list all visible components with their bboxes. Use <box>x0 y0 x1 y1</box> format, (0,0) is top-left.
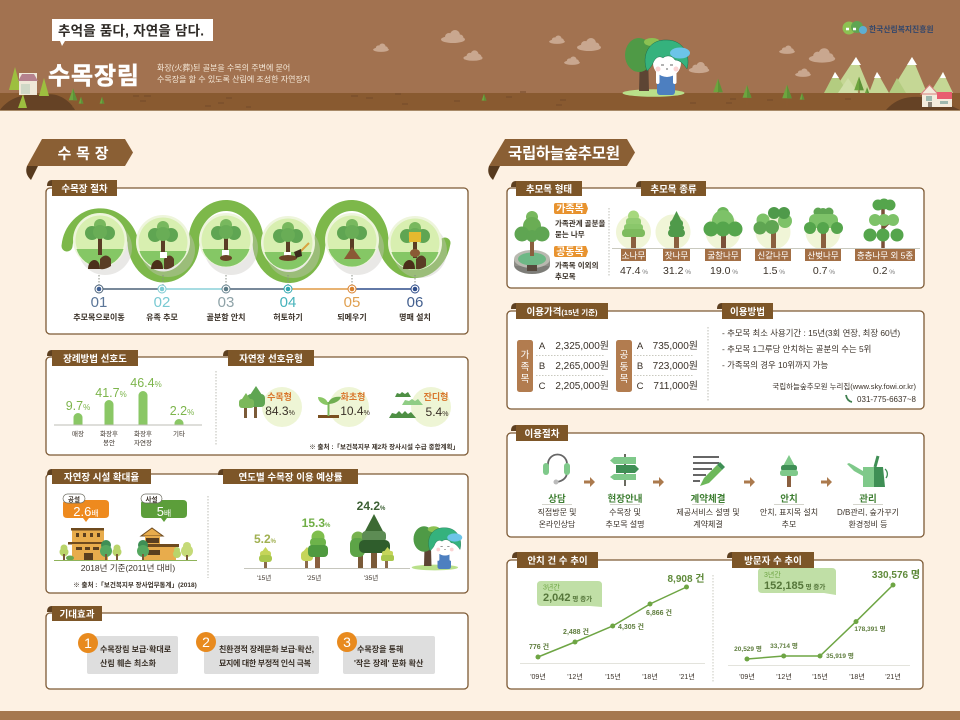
step: 관리: 환경정비 등 <box>848 519 888 529</box>
step circles <box>73 213 447 278</box>
price table: 가족목 <box>517 340 609 392</box>
effect 2 <box>196 632 319 674</box>
organization logo <box>842 21 934 34</box>
callout: 3년간 152,185명 증가: 3년간 <box>764 570 781 579</box>
price table: 공동목: B <box>637 361 643 372</box>
step: 상담: 온라인상담 <box>539 519 576 529</box>
tree species chart: 31.2 % <box>663 265 691 277</box>
effect 1: 산림 훼손 최소화 <box>100 658 157 668</box>
step: 현장안내: 수목장 및 <box>609 507 641 517</box>
callout: 사설 5배: 5배 <box>157 504 171 519</box>
step: 현장안내: 현장안내 <box>608 493 642 505</box>
step labels: 유족 추모 <box>146 313 178 322</box>
line chart: placements: '15년 <box>605 672 621 681</box>
panel: 이용가격 / 이용방법 <box>507 303 924 409</box>
tab: 자연장 선호유형: 자연장 선호유형 <box>239 353 303 365</box>
effect 3: 3 <box>343 634 351 650</box>
tab: 장례방법 선호도: 장례방법 선호도 <box>63 353 127 365</box>
step labels: 01 <box>91 294 107 311</box>
label: 가족목: 가족목 <box>556 202 584 215</box>
step: 관리: D/B관리, 숲가꾸기 <box>837 507 899 517</box>
step: 안치 <box>760 455 818 529</box>
price table: 공동목: 735,000원 <box>653 340 698 352</box>
effect 3 <box>337 632 435 674</box>
tab: 기대효과: 기대효과 <box>60 608 95 620</box>
subtitle: 화장(火葬)된 골분을 수목의 주변에 묻어 <box>157 62 290 72</box>
tab: 연도별 수목장 이용 예상률: 연도별 수목장 이용 예상률 <box>238 472 343 484</box>
line chart: visitors: '21년 <box>885 672 901 681</box>
price table: 가족목: 2,325,000원 <box>555 340 609 352</box>
panel: 기대효과 <box>46 606 468 689</box>
step: 안치: 안치 <box>780 493 798 505</box>
effect 2: 2 <box>202 634 210 650</box>
step labels: 06 <box>407 294 423 311</box>
character with tree <box>622 38 690 97</box>
section heading: 수목장: 수 목 장 <box>58 146 109 162</box>
source note: ※ 출처 :「보건복지부 제2차 장사시설 수급 종합계획」 <box>309 442 459 451</box>
step: 계약체결: 계약체결 <box>691 493 725 505</box>
label: 공동목: 공동목 <box>556 246 584 258</box>
usage notes: - 가족목의 경우 10위까지 가능 <box>722 360 828 370</box>
slogan speech bubble <box>52 19 213 46</box>
bar chart: 기타 <box>173 429 185 438</box>
bar chart: 매장 <box>72 429 84 438</box>
type: 수목형 <box>239 386 302 427</box>
green ribbon <box>67 205 445 278</box>
header banner <box>0 0 960 111</box>
chart: tree-scale usage forecast: '35년 <box>364 573 378 582</box>
price table: 가족목: 2,205,000원 <box>555 380 609 392</box>
price table: 가족목: A <box>539 341 546 352</box>
arrow <box>744 477 755 487</box>
step: 상담 <box>537 454 577 529</box>
line chart: visitors: '18년 <box>849 672 865 681</box>
panel: 장례방법 선호도 / 자연장 선호유형 <box>46 350 468 455</box>
bar chart: 자연장 <box>134 438 152 447</box>
step: 상담: 직접방문 및 <box>537 507 577 517</box>
step: 현장안내: 추모목 설명 <box>605 519 645 529</box>
step labels: 05 <box>344 294 360 311</box>
line chart: visitors <box>728 569 920 681</box>
line chart: placements: 4,305 건 <box>618 622 644 631</box>
tree species chart: 층층나무 외 5종 <box>857 250 913 260</box>
subtitle <box>157 62 310 84</box>
step: 계약체결 <box>676 457 740 529</box>
callout: 사설 5배 <box>141 494 187 522</box>
label: 공동목 <box>554 246 599 281</box>
buildings <box>54 528 197 561</box>
main title: 수목장림 <box>48 63 139 90</box>
price table: 가족목: C <box>539 381 546 392</box>
tab: 이용가격: 이용가격(15년 기준) <box>526 306 598 318</box>
type: 잔디형 <box>389 387 451 427</box>
effect 1: 1 <box>84 635 92 651</box>
usage notes: - 추모목 1그루당 안치하는 골분의 수는 5위 <box>722 344 871 354</box>
price table: 가족목: 가 <box>521 350 530 361</box>
tree species chart: 47.4 % <box>620 265 648 277</box>
source note: ※ 출처 :「보건복지부 장사업무통계」(2018) <box>73 580 197 589</box>
panel: 안치 건 수 / 방문자 수 추이 <box>507 552 923 689</box>
section heading: 수목장 <box>26 139 133 180</box>
character with tree <box>412 526 462 570</box>
tree species chart: 잣나무 <box>665 250 688 260</box>
callout: 3년간 2,042명 증가: 2,042 명 증가 <box>543 592 592 604</box>
callout: 공설 2.6배: 공설 <box>68 494 80 504</box>
type: 수목형: 수목형 <box>267 391 292 402</box>
bar chart: 9.7% <box>66 399 90 413</box>
line chart: placements: '18년 <box>642 672 658 681</box>
tab: 추모목 형태 <box>516 181 582 196</box>
tree species chart: 굴참나무 <box>707 250 739 260</box>
tree species chart: 산벚나무 <box>807 250 839 260</box>
label: 가족목: 묻는 나무 <box>555 229 585 239</box>
timeline <box>95 275 419 293</box>
line chart: visitors: 20,529 명 <box>734 644 762 653</box>
type: 화초형: 화초형 <box>341 391 365 402</box>
type: 잔디형: 잔디형 <box>424 391 448 402</box>
price table: 가족목: 목 <box>521 374 530 385</box>
step labels <box>73 294 431 322</box>
label: 가족목 <box>554 202 605 239</box>
tree species chart: 0.2 % <box>873 265 895 277</box>
base-year caption: 2018년 기준(2011년 대비) <box>81 563 175 573</box>
tab: 이용방법: 이용방법 <box>730 306 765 318</box>
tab: 추모목 종류 <box>641 181 706 196</box>
callout: 공설 2.6배 <box>63 494 109 522</box>
label: 가족목: 가족관계 골분을 <box>555 218 605 228</box>
chart: tree-scale usage forecast: '25년 <box>307 573 321 582</box>
callout: 3년간 152,185명 증가: 152,185 명 증가 <box>764 580 825 592</box>
line chart: placements: '09년 <box>530 672 546 681</box>
icon: family tree in planter <box>514 211 550 274</box>
line chart: visitors: 178,391 명 <box>854 624 886 633</box>
tab: 수목장 절차 <box>52 180 117 196</box>
line chart: placements: 776 건 <box>529 642 549 651</box>
step labels: 골분함 안치 <box>206 312 246 322</box>
panel: 수목장 절차 <box>46 180 468 334</box>
tab: 자연장 선호유형 <box>228 350 314 366</box>
step labels: 되메우기 <box>337 312 367 322</box>
tab: 장례방법 선호도 <box>52 350 138 366</box>
tab: 수목장 절차: 수목장 절차 <box>61 183 108 195</box>
type: 화초형: 10.4% <box>340 404 370 418</box>
tab: 자연장 시설 확대율 <box>52 469 151 484</box>
section heading: 국립하늘숲추모원: 국립하늘숲추모원 <box>508 144 620 162</box>
usage notes: - 추모목 최소 사용기간 : 15년(3회 연장, 최장 60년) <box>722 328 900 338</box>
step: 계약체결: 계약체결 <box>693 519 723 529</box>
step labels: 03 <box>218 294 234 311</box>
arrow <box>653 477 664 487</box>
price table: 공동목: 동 <box>620 362 629 373</box>
bar chart: 46.4% <box>130 376 162 390</box>
line chart: placements: 6,866 건 <box>646 608 672 617</box>
effect 1 <box>78 633 178 674</box>
type: 수목형: 84.3% <box>265 404 295 418</box>
organization logo: 한국산림복지진흥원 <box>869 24 934 34</box>
chart: tree-scale usage forecast: 24.2% <box>357 499 386 513</box>
bar chart: 화장후 <box>100 429 118 438</box>
callout: 3년간 2,042명 증가 <box>537 581 602 607</box>
tab: 기대효과 <box>52 606 102 621</box>
step labels: 추모목으로이동 <box>73 312 125 322</box>
price table: 가족목: 족 <box>521 362 530 373</box>
line chart: placements: '21년 <box>679 672 695 681</box>
usage notes: 국립하늘숲추모원 누리집(www.sky.fowi.or.kr) <box>772 381 916 391</box>
type: 화초형 <box>318 387 370 427</box>
tab: 자연장 시설 확대율: 자연장 시설 확대율 <box>64 472 139 484</box>
panel: 자연장 시설 확대율 / 연도별 수목장 이용 예상률 <box>46 469 468 593</box>
line chart: placements <box>520 573 705 681</box>
line chart: visitors: '09년 <box>739 672 755 681</box>
chart: tree-scale usage forecast <box>244 499 410 582</box>
line chart: placements: 8,908 건 <box>667 573 705 585</box>
step: 관리: 관리 <box>859 494 877 505</box>
price table: 공동목: 공 <box>620 350 629 361</box>
tree species chart: 0.7 % <box>813 265 835 277</box>
panel: 추모목 형태 / 추모목 종류 <box>507 181 924 288</box>
callout: 공설 2.6배: 2.6배 <box>73 504 99 519</box>
price table: 가족목: 2,265,000원 <box>555 360 609 372</box>
effect 3: '작은 장례' 문화 확산 <box>354 658 424 668</box>
step: 상담: 상담 <box>548 493 566 505</box>
label: 공동목: 가족목 이외의 <box>555 260 599 270</box>
bottom band <box>0 711 960 720</box>
bar chart: 화장후 <box>134 429 152 438</box>
tab: 이용절차 <box>516 425 568 441</box>
callout: 3년간 152,185명 증가 <box>758 568 836 595</box>
tree species chart: 소나무 <box>622 250 645 260</box>
tab: 추모목 형태: 추모목 형태 <box>526 184 572 196</box>
line chart: visitors: 330,576 명 <box>872 569 920 581</box>
bar chart: 41.7% <box>95 386 127 400</box>
tab: 안치 건 수 추이: 안치 건 수 추이 <box>527 555 588 567</box>
label: 공동목: 추모목 <box>555 272 576 281</box>
panel: 이용절차 <box>507 425 924 537</box>
effect 2: 묘지에 대한 부정적 인식 극복 <box>219 658 312 668</box>
type: 잔디형: 5.4% <box>426 405 448 419</box>
tab: 방문자 수 추이: 방문자 수 추이 <box>744 555 802 567</box>
slogan speech bubble: 추억을 품다, 자연을 담다. <box>58 24 204 38</box>
effect 2: 친환경적 장례문화 보급·확산, <box>219 644 314 654</box>
tab: 방문자 수 추이 <box>732 552 814 568</box>
step: 안치: 추모 <box>782 520 796 529</box>
tree species chart: 19.0 % <box>710 265 738 277</box>
effect 1: 수목장림 보급·확대로 <box>100 644 172 654</box>
tab: 안치 건 수 추이 <box>517 552 598 568</box>
chart: tree-scale usage forecast: '15년 <box>257 573 271 582</box>
callout: 3년간 2,042명 증가: 3년간 <box>543 582 560 592</box>
section heading: 국립하늘숲추모원 <box>488 139 635 180</box>
callout: 사설 5배: 사설 <box>146 494 157 504</box>
tab: 추모목 종류: 추모목 종류 <box>650 184 697 196</box>
chart: tree-scale usage forecast: 15.3% <box>302 516 331 530</box>
line chart: visitors: 35,919 명 <box>826 651 854 660</box>
arrow <box>821 477 832 487</box>
bar chart <box>54 376 202 447</box>
tab: 이용절차: 이용절차 <box>525 428 560 440</box>
price table: 가족목: B <box>539 361 545 372</box>
tab: 이용방법 <box>722 303 773 319</box>
arrow <box>584 477 595 487</box>
step labels: 명패 설치 <box>399 312 431 322</box>
step: 계약체결: 제공서비스 설명 및 <box>676 507 740 517</box>
price table: 공동목 <box>616 340 698 392</box>
line chart: visitors: '12년 <box>776 672 792 681</box>
step: 안치: 안치, 표지목 설치 <box>760 507 818 517</box>
bar chart: 봉안 <box>103 438 115 447</box>
tree species chart: 1.5 % <box>763 265 785 277</box>
line chart: placements: 2,488 건 <box>563 627 589 636</box>
step: 관리 <box>837 456 899 529</box>
tab: 연도별 수목장 이용 예상률 <box>223 469 358 484</box>
effect 3: 수목장을 통해 <box>357 644 403 654</box>
step labels: 02 <box>154 294 170 311</box>
line chart: visitors: '15년 <box>812 672 828 681</box>
price table: 공동목: C <box>637 381 644 392</box>
step: 현장안내 <box>605 454 645 529</box>
line chart: placements: '12년 <box>567 672 583 681</box>
step labels: 04 <box>280 294 296 311</box>
price table: 공동목: 723,000원 <box>653 360 698 372</box>
step labels: 허토하기 <box>273 312 303 322</box>
bar chart: 2.2% <box>170 404 194 418</box>
price table: 공동목: 711,000원 <box>653 380 698 392</box>
usage notes <box>722 328 917 404</box>
tab: 이용가격 <box>516 303 608 319</box>
price table: 공동목: 목 <box>620 374 629 385</box>
price table: 공동목: A <box>637 341 644 352</box>
tree species chart: 신갈나무 <box>757 250 789 260</box>
usage notes: 031-775-6637~8 <box>857 395 917 404</box>
subtitle: 수목장을 할 수 있도록 산림에 조성한 자연장지 <box>157 74 310 84</box>
tree species chart <box>612 198 920 277</box>
line chart: visitors: 33,714 명 <box>770 641 798 650</box>
chart: tree-scale usage forecast: 5.2% <box>254 532 277 546</box>
